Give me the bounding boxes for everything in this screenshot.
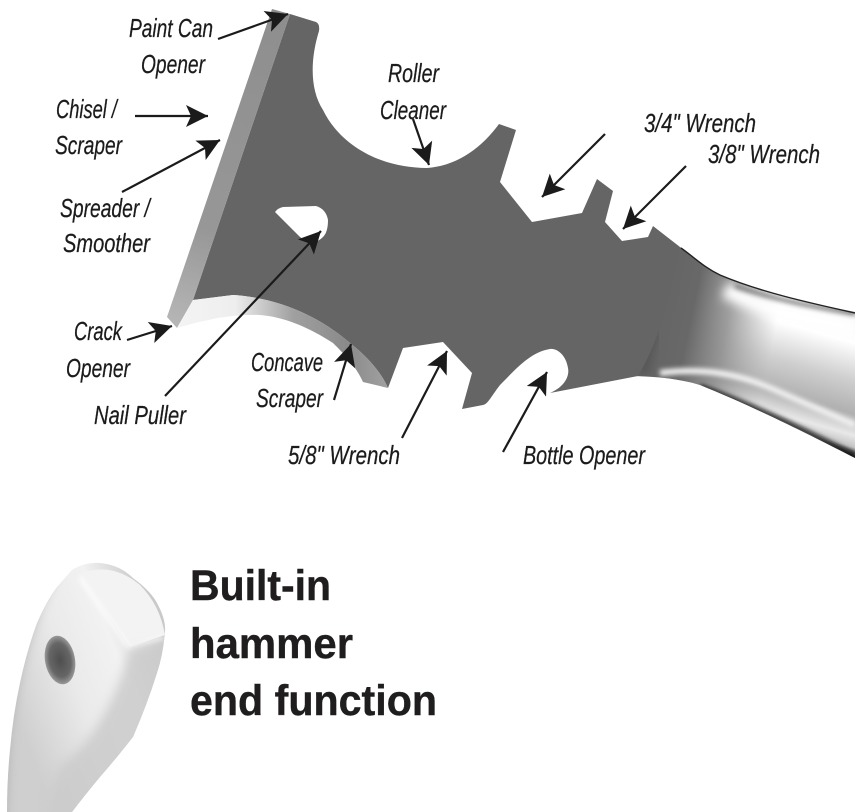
heading: built-in hammer end function: Built-in bbox=[190, 562, 331, 610]
label: roller cleaner bbox=[380, 58, 447, 125]
heading: built-in hammer end function: hammer bbox=[190, 620, 353, 668]
label: crack opener: Opener bbox=[66, 353, 131, 383]
blade face bbox=[193, 14, 680, 409]
label: crack opener bbox=[66, 316, 131, 383]
arrow: crack opener bbox=[127, 326, 172, 340]
handle edges bbox=[681, 248, 855, 313]
left chisel bevel bbox=[167, 9, 290, 328]
nail puller hole bbox=[275, 206, 328, 242]
arrow: spreader smoother bbox=[122, 140, 220, 192]
label: concave scraper: Concave bbox=[251, 347, 323, 377]
hammer hole bbox=[44, 636, 76, 684]
arrow: 3/8 wrench bbox=[623, 166, 686, 229]
heading: built-in hammer end function: end function bbox=[190, 677, 437, 725]
arrow: chisel scraper bbox=[135, 115, 208, 117]
handle bbox=[630, 240, 855, 465]
tool: multi-function blade and handle bbox=[167, 9, 855, 465]
arrow: 5/8 wrench bbox=[402, 351, 447, 438]
label: nail puller: Nail Puller bbox=[94, 400, 187, 430]
label: 3/4 wrench: 3/4" Wrench bbox=[644, 108, 756, 138]
heading: built-in hammer end function bbox=[190, 562, 437, 725]
label: 3/8 wrench: 3/8" Wrench bbox=[708, 139, 820, 169]
arrow: concave scraper bbox=[334, 344, 351, 400]
arrow: roller cleaner bbox=[413, 119, 429, 165]
label: chisel scraper bbox=[55, 94, 123, 160]
label: concave scraper: Scraper bbox=[256, 383, 324, 413]
label: 5/8 wrench: 5/8" Wrench bbox=[288, 440, 400, 470]
arrow: nail puller bbox=[165, 231, 321, 396]
label: roller cleaner: Roller bbox=[388, 58, 440, 88]
label: crack opener: Crack bbox=[74, 316, 123, 346]
arrow: bottle opener bbox=[503, 372, 547, 452]
label: spreader smoother: Smoother bbox=[63, 228, 151, 258]
lower concave bevel bbox=[177, 295, 388, 388]
icon: hammer end of handle bbox=[7, 563, 166, 812]
label: spreader smoother: Spreader / bbox=[60, 193, 152, 223]
label: paint can opener bbox=[129, 13, 213, 79]
arrow: paint can opener bbox=[218, 14, 288, 39]
label: chisel scraper: Scraper bbox=[55, 130, 123, 160]
label: bottle opener: Bottle Opener bbox=[523, 440, 646, 470]
label: paint can opener: Opener bbox=[141, 49, 206, 79]
label: chisel scraper: Chisel / bbox=[56, 94, 119, 124]
arrow: 3/4 wrench bbox=[542, 134, 605, 197]
label: roller cleaner: Cleaner bbox=[380, 95, 447, 125]
label: concave scraper bbox=[251, 347, 324, 413]
label: spreader smoother bbox=[60, 193, 152, 258]
label: paint can opener: Paint Can bbox=[129, 13, 213, 43]
top facet bbox=[94, 570, 164, 644]
